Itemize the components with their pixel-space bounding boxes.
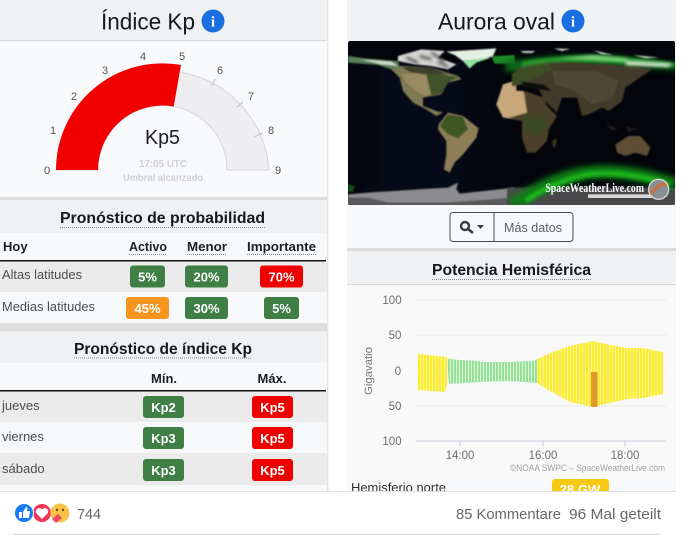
shares count: 96 Mal geteilt [569, 506, 662, 523]
bar chart: hemispheric power: 18:00 [611, 450, 639, 462]
heading: Pronóstico de probabilidad: Pronóstico de probabilidad [60, 210, 265, 227]
bar chart: hemispheric power: ©NOAA SWPC – SpaceWeatherLive.com [510, 463, 665, 474]
bar chart: hemispheric power: 14:00 [446, 450, 474, 462]
panel: Aurora oval [347, 0, 676, 248]
gauge chart: Umbral alcanzado [123, 173, 203, 184]
aurora: northern oval [522, 58, 675, 65]
row: viernes: viernes [2, 429, 44, 444]
bar chart: hemispheric power [363, 295, 666, 474]
row: viernes: Kp3 [151, 431, 176, 446]
bar chart: hemispheric power: Gigavatio [363, 347, 375, 395]
gauge chart: 2 [71, 91, 77, 103]
yellow bars left [418, 354, 447, 392]
gauge chart: 3 [102, 65, 108, 77]
row: jueves: jueves [1, 398, 40, 413]
icon: info [202, 10, 224, 32]
row: jueves: Kp2 [151, 400, 176, 415]
gauge chart: 9 [275, 165, 281, 177]
panel: Pronóstico de índice Kp [0, 323, 327, 491]
gauge chart: 5 [179, 51, 185, 63]
row: Medias latitudes: 45% [134, 301, 161, 316]
row: sábado: Kp3 [151, 463, 176, 478]
row: Altas latitudes: 20% [193, 270, 220, 284]
table header: Máx. [258, 371, 286, 386]
heading: Índice Kp: Índice Kp [101, 8, 195, 34]
heading: Aurora oval: Aurora oval [438, 8, 555, 34]
row: Altas latitudes: 70% [268, 270, 295, 284]
row: Hemisferio norte [351, 479, 609, 501]
western hemisphere [348, 48, 516, 205]
green bars [447, 359, 537, 384]
eastern hemisphere [505, 48, 676, 205]
icon: love reaction [32, 504, 52, 522]
bar chart: hemispheric power: 50 [389, 330, 401, 342]
table header [0, 239, 326, 262]
row: Medias latitudes [2, 297, 299, 319]
gauge chart: 6 [217, 65, 223, 77]
gauge chart: 8 [268, 125, 274, 137]
row: Medias latitudes: 30% [193, 301, 220, 316]
gauge chart: 1 [50, 125, 56, 137]
table header: Activo [129, 239, 167, 254]
row: Hemisferio norte: Hemisferio norte [351, 480, 446, 495]
row: viernes: Kp5 [260, 431, 285, 446]
row: sábado: Kp5 [260, 463, 285, 478]
button group [450, 212, 573, 242]
panel: Índice Kp [0, 0, 328, 491]
gauge chart: 7 [248, 91, 254, 103]
icon: info: i [571, 14, 575, 30]
table header: Importante [247, 239, 316, 254]
row: Medias latitudes: 5% [272, 301, 291, 316]
row: sábado: sábado [2, 461, 45, 476]
row: viernes [2, 427, 293, 449]
row: Altas latitudes: 5% [138, 270, 157, 284]
yellow bars right [537, 341, 663, 407]
comments count: 85 Kommentare [456, 506, 561, 523]
panel: Pronóstico de probabilidad [0, 197, 327, 323]
gauge chart: 4 [140, 51, 146, 63]
gauge chart: Kp5 [145, 127, 180, 149]
icon: info [562, 10, 584, 32]
bar chart: hemispheric power: 100 [382, 436, 402, 448]
heading: Pronóstico de índice Kp: Pronóstico de índice Kp [74, 341, 252, 358]
table header: Menor [187, 239, 227, 254]
row: jueves: Kp5 [260, 400, 285, 415]
bar chart: hemispheric power: 0 [395, 366, 401, 378]
gauge chart: 0 [44, 165, 50, 177]
bar chart: hemispheric power: 50 [389, 401, 401, 413]
row: sábado [2, 459, 293, 481]
row: Altas latitudes: Altas latitudes [2, 267, 82, 282]
aurora world map [348, 41, 676, 205]
table header: Hoy [3, 239, 28, 254]
gauge chart [44, 51, 281, 184]
aurora: southern oval [512, 172, 675, 205]
heading: Potencia Hemisférica: Potencia Hemisférica [432, 262, 591, 279]
icon: info: i [211, 14, 215, 30]
row: Medias latitudes: Medias latitudes [2, 299, 95, 314]
table header [0, 371, 326, 392]
gauge chart: 17:05 UTC [139, 159, 187, 170]
row: Altas latitudes [2, 266, 303, 288]
footer: reactions bar [0, 491, 682, 535]
row: Hemisferio norte: 28 GW [560, 482, 601, 497]
bar chart: hemispheric power: 100 [382, 295, 402, 307]
icon: like reaction [14, 504, 34, 522]
icon: zoom magnifier [461, 222, 484, 233]
eastern hemisphere: SpaceWeatherLive.com [545, 180, 644, 195]
logo globe [649, 179, 669, 199]
icon: care reaction [50, 504, 70, 523]
button group: Más datos [504, 220, 562, 235]
table header: Mín. [151, 371, 177, 386]
reaction count: 744 [77, 506, 101, 523]
current bar [591, 372, 598, 407]
panel: Potencia Hemisférica [347, 248, 676, 501]
row: jueves [1, 396, 293, 418]
bar chart: hemispheric power: 16:00 [529, 450, 557, 462]
